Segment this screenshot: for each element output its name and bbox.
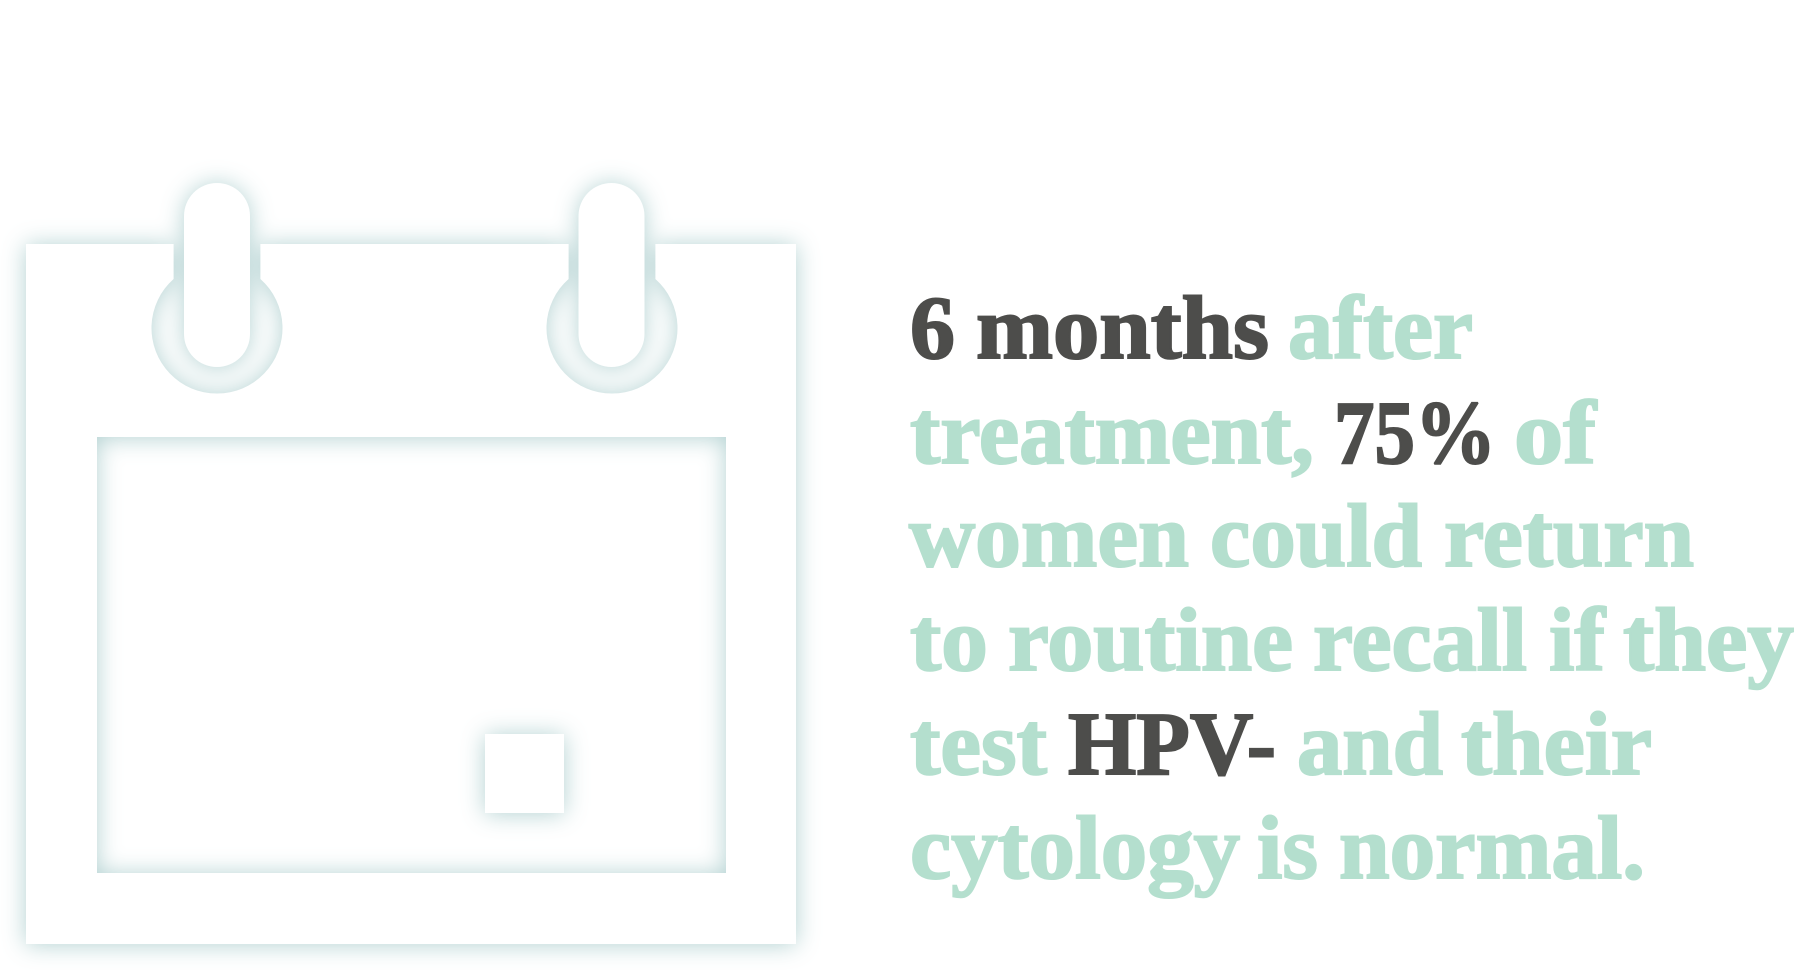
line 2: treatment, bbox=[910, 384, 1314, 483]
line 4: they bbox=[1623, 591, 1794, 690]
line 2: 75% bbox=[1334, 384, 1496, 483]
line 2: of bbox=[1514, 384, 1597, 483]
icon: calendar bbox=[26, 183, 796, 944]
calendar body with window bbox=[26, 244, 796, 944]
line 6: normal. bbox=[1339, 799, 1645, 898]
line 6: cytology bbox=[910, 799, 1240, 898]
line 3 bbox=[909, 487, 1694, 586]
left binder ring bbox=[184, 183, 250, 367]
line 1: months bbox=[976, 279, 1269, 378]
line 1: after bbox=[1288, 279, 1473, 378]
line 2 bbox=[910, 384, 1597, 483]
line 4: routine bbox=[1008, 591, 1293, 690]
line 6: is bbox=[1257, 799, 1318, 898]
line 5: and bbox=[1297, 695, 1443, 794]
line 6 bbox=[910, 799, 1645, 898]
line 4: if bbox=[1549, 591, 1606, 690]
right binder ring bbox=[578, 183, 644, 367]
line 4 bbox=[910, 591, 1794, 690]
line 5: their bbox=[1461, 695, 1652, 794]
line 3: could bbox=[1210, 487, 1422, 586]
text block: statistic bbox=[909, 279, 1794, 898]
line 3: return bbox=[1444, 487, 1694, 586]
line 4: recall bbox=[1313, 591, 1527, 690]
line 3: women bbox=[909, 487, 1189, 586]
line 4: to bbox=[910, 591, 988, 690]
marked day square bbox=[485, 734, 564, 813]
line 5: HPV- bbox=[1068, 695, 1276, 794]
line 5: test bbox=[910, 695, 1047, 794]
line 1: 6 bbox=[910, 279, 955, 378]
line 5 bbox=[910, 695, 1652, 794]
line 1 bbox=[910, 279, 1473, 378]
